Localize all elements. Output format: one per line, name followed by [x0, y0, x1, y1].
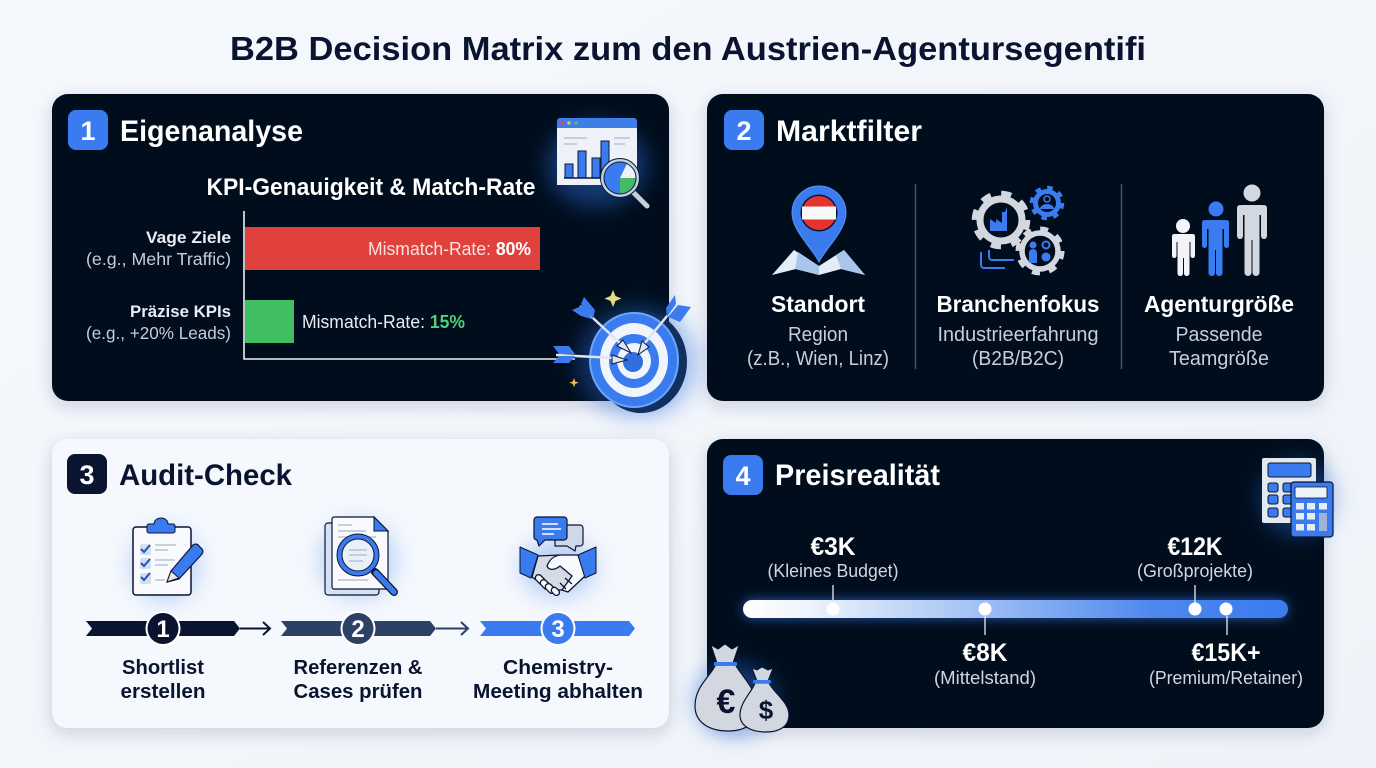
- text: Referenzen & Cases prüfen: Cases prüfen: [294, 680, 422, 703]
- icon: document with magnifier: [320, 517, 396, 598]
- badge 2: [724, 110, 764, 150]
- heading: Preisrealität: Preisrealität: [775, 459, 940, 492]
- step 2: 2: [351, 616, 365, 643]
- badge 1: 1: [80, 116, 96, 146]
- label: Präzise KPIs: (e.g., +20% Leads): [86, 323, 231, 343]
- text: Agenturgröße: [1144, 291, 1294, 370]
- badge 3: 3: [79, 460, 95, 490]
- text: Branchenfokus: Branchenfokus: [936, 291, 1100, 317]
- text: Standort: [747, 291, 889, 370]
- step 1: [86, 611, 270, 646]
- icon: target with arrows: [553, 290, 698, 418]
- label: €8K: [934, 639, 1036, 688]
- label: €3K: [768, 533, 898, 581]
- title: B2B Decision Matrix zum den Austrien-Agentursegentifi: [230, 30, 1146, 67]
- text: Referenzen & Cases prüfen: [294, 656, 423, 703]
- text: Standort: Standort: [771, 291, 865, 317]
- label: Vage Ziele: Vage Ziele: [146, 228, 231, 247]
- text: Branchenfokus: [936, 291, 1100, 370]
- text: Agenturgröße: Agenturgröße: [1144, 291, 1294, 317]
- badge 1: [68, 110, 108, 150]
- text: Chemistry-Meeting abhalten: Meeting abhalten: [473, 680, 643, 703]
- icon: money bags: €: [717, 683, 736, 721]
- badge 3: [67, 454, 107, 494]
- label: €3K: (Kleines Budget): [768, 561, 898, 581]
- arrow left: [553, 346, 627, 364]
- text: Shortlist erstellen: erstellen: [120, 680, 206, 703]
- panel: Eigenanalyse: [52, 94, 669, 401]
- badge 4: [723, 455, 763, 495]
- label: €15K+: [1149, 639, 1303, 688]
- bar: green 15%: Mismatch-Rate: 15%: [302, 312, 465, 332]
- chart title: KPI-Genauigkeit & Match-Rate: [206, 174, 536, 201]
- bar: red 80%: Mismatch-Rate: 80%: [368, 239, 531, 259]
- label: Vage Ziele: (e.g., Mehr Traffic): [86, 249, 231, 269]
- text: Shortlist erstellen: [120, 656, 206, 703]
- icon: calculators: [1260, 458, 1336, 537]
- arrow top-left: [572, 297, 631, 353]
- label: Präzise KPIs: [86, 302, 231, 343]
- label: €15K+: (Premium/Retainer): [1149, 668, 1303, 688]
- text: Standort: (z.B., Wien, Linz): [747, 348, 889, 370]
- text: Standort: Region: [788, 324, 848, 346]
- text: Referenzen & Cases prüfen: Referenzen &: [294, 656, 423, 679]
- text: Chemistry-Meeting abhalten: Chemistry-: [503, 656, 613, 679]
- heading: Marktfilter: Marktfilter: [776, 115, 922, 148]
- label: €12K: [1137, 533, 1253, 581]
- label: €8K: €8K: [962, 639, 1008, 667]
- text: Shortlist erstellen: Shortlist: [122, 656, 204, 679]
- text: Branchenfokus: Industrieerfahrung: [938, 324, 1098, 346]
- text: Branchenfokus: (B2B/B2C): [972, 348, 1064, 370]
- price scale: [743, 585, 1288, 635]
- panel: Marktfilter: [707, 94, 1324, 401]
- text: Chemistry-Meeting abhalten: [473, 656, 643, 703]
- badge 4: 4: [735, 461, 751, 491]
- step 3: 3: [551, 616, 565, 643]
- label: Präzise KPIs: Präzise KPIs: [130, 302, 231, 321]
- panel: Audit-Check: [52, 439, 669, 728]
- bar chart: [86, 211, 575, 359]
- heading: Eigenanalyse: Eigenanalyse: [120, 115, 303, 148]
- text: Agenturgröße: Passende: [1176, 324, 1262, 346]
- label: Vage Ziele: [86, 228, 231, 269]
- badge 2: 2: [736, 116, 752, 146]
- icon: money bags: $: [759, 695, 774, 725]
- step 1: 1: [156, 616, 170, 643]
- icon: money bags: [693, 644, 789, 736]
- label: €12K: (Großprojekte): [1137, 561, 1253, 581]
- icon: clipboard: [131, 518, 203, 601]
- label: €12K: €12K: [1168, 533, 1222, 561]
- icon: gears: [975, 188, 1062, 273]
- heading: Audit-Check: Audit-Check: [119, 459, 292, 492]
- step 2: [281, 611, 468, 646]
- label: €15K+: €15K+: [1192, 639, 1260, 667]
- icon: map pin Austria: [772, 186, 865, 275]
- axes: [244, 211, 575, 359]
- panel: Preisrealität: [707, 439, 1324, 728]
- label: €8K: (Mittelstand): [934, 668, 1036, 688]
- icon: dashboard with magnifier: [547, 118, 647, 207]
- icon: people sizes: [1172, 184, 1267, 276]
- arrow top-right: [638, 295, 691, 355]
- icon: handshake with chat bubbles: [520, 517, 596, 598]
- bar: red 80%: [245, 227, 540, 270]
- text: Agenturgröße: Teamgröße: [1169, 348, 1269, 370]
- process ribbon: [86, 611, 635, 646]
- bar: green 15%: [245, 300, 465, 343]
- step 3: [480, 611, 635, 646]
- label: €3K: €3K: [810, 533, 856, 561]
